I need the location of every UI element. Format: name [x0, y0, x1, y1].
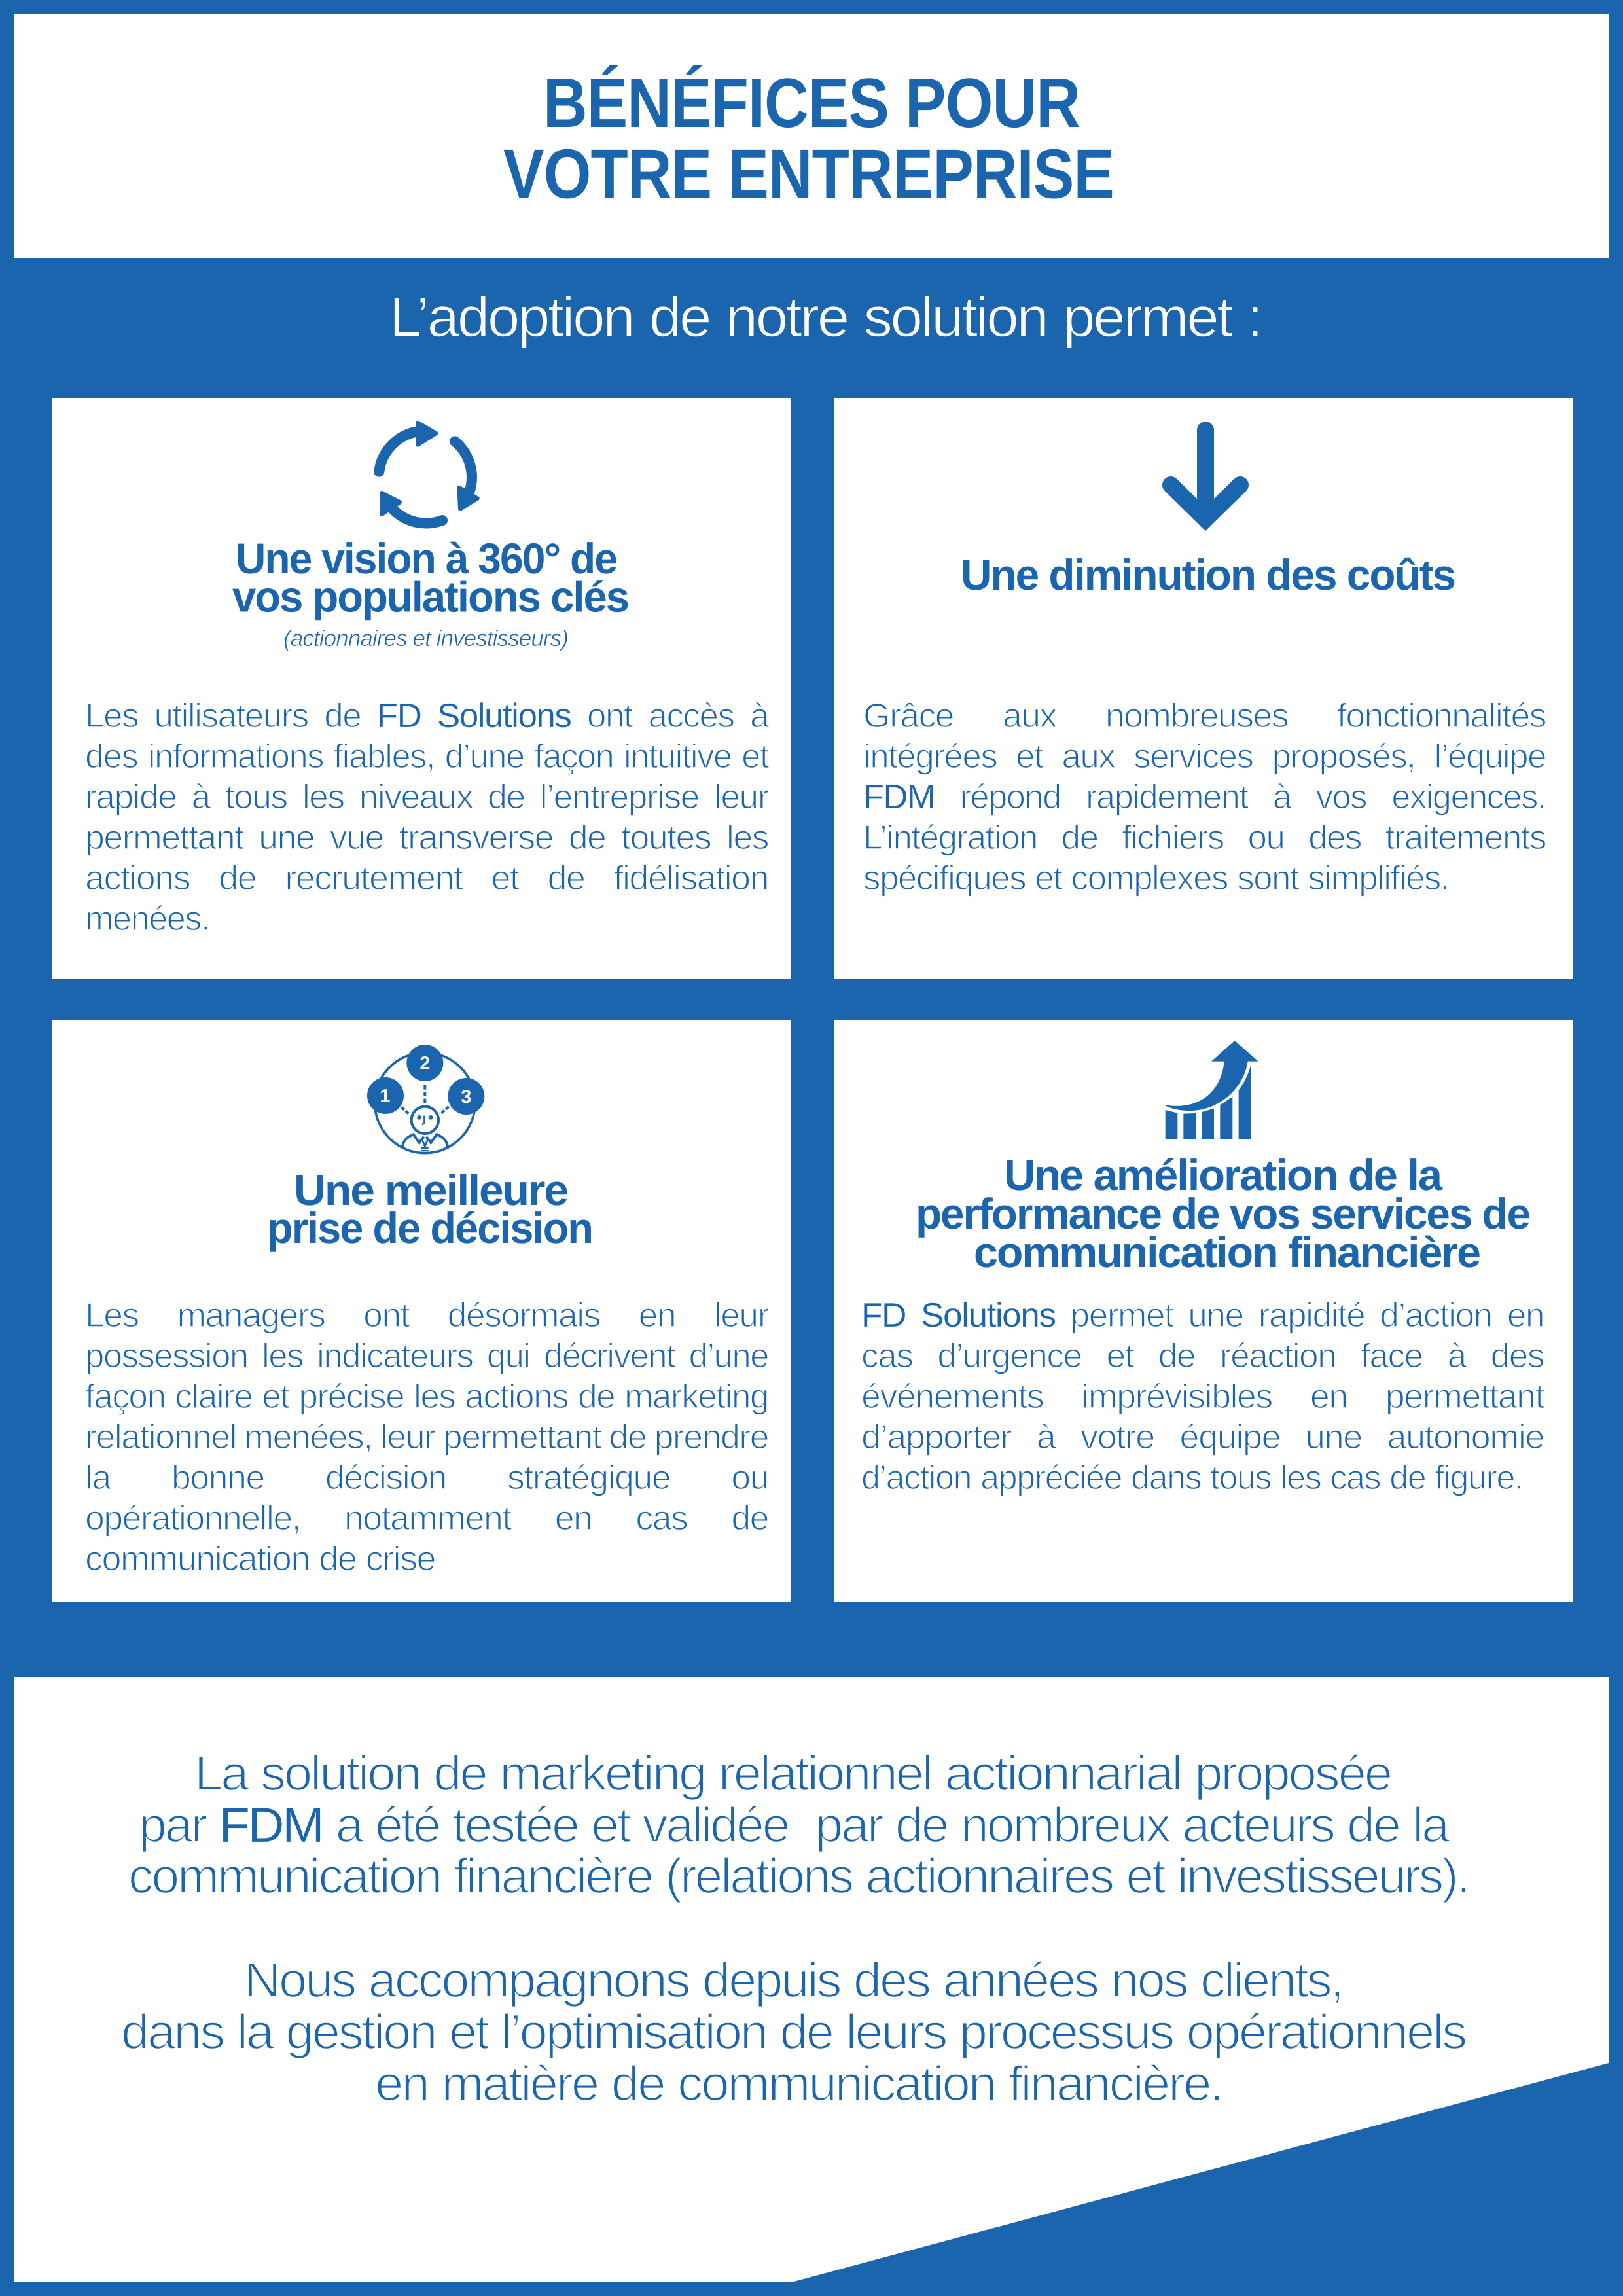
panel: closing statement — [14, 1677, 1609, 2282]
text: decisions body: Les managers ont désormais en leur — [85, 1297, 769, 1335]
note: audience: (actionnaires et investisseurs) — [283, 626, 568, 651]
text: performance body: d’action appréciée dans tous les cas de figure. — [861, 1459, 1523, 1497]
text: decisions body — [85, 1297, 769, 1578]
text: validation paragraph: communication financière (relations actionnaires et investisseurs). — [128, 1848, 1469, 1903]
title: VOTRE ENTREPRISE — [503, 135, 1114, 213]
text: validation paragraph — [128, 1746, 1469, 1903]
panel: performance — [834, 1020, 1573, 1602]
text: costs body: L’intégration de fichiers ou des traitements — [863, 819, 1546, 857]
heading: vision: Une vision à 360° de — [236, 534, 616, 583]
text: performance body: d’apporter à votre équipe une autonomie — [861, 1418, 1544, 1456]
heading: performance: Une amélioration de la — [1004, 1151, 1443, 1199]
icon: circular arrows — [379, 423, 477, 523]
title — [503, 63, 1114, 213]
text: decisions body: façon claire et précise les actions de marketing — [85, 1378, 768, 1416]
icon: growth chart — [1166, 1041, 1258, 1139]
heading: decisions: prise de décision — [267, 1204, 592, 1252]
panel: cost reduction — [834, 398, 1573, 979]
title: BÉNÉFICES POUR — [543, 63, 1080, 142]
heading: vision — [232, 534, 628, 620]
text: costs body: FDM répond rapidement à vos exigences. — [863, 778, 1546, 816]
text: support paragraph: dans la gestion et l’optimisation de leurs processus opérationnels — [121, 2004, 1466, 2059]
heading: performance: performance de vos services de — [916, 1189, 1529, 1238]
text: performance body — [861, 1297, 1545, 1497]
icon: decision circle — [367, 1045, 484, 1153]
text: costs body: Grâce aux nombreuses fonctionnalités — [863, 697, 1546, 735]
text: vision body: des informations fiables, d’une façon intuitive et — [85, 738, 770, 776]
heading: costs: Une diminution des coûts — [961, 550, 1455, 599]
text: vision body: Les utilisateurs de FD Solutions ont accès à — [85, 697, 770, 735]
text: support paragraph: Nous accompagnons depuis des années nos clients, — [244, 1952, 1342, 2007]
icon: decision circle: 1 — [380, 1085, 390, 1106]
icon: decision circle: 2 — [419, 1052, 430, 1073]
text: validation paragraph: La solution de marketing relationnel actionnarial proposée — [194, 1746, 1391, 1801]
heading: decisions — [267, 1166, 592, 1252]
text: validation paragraph: par FDM a été testée et validée par de nombreux acteurs de la — [139, 1797, 1450, 1852]
heading: performance — [916, 1151, 1529, 1276]
text: vision body: actions de recrutement et de fidélisation — [85, 859, 768, 897]
text: costs body: intégrées et aux services proposés, l’équipe — [863, 738, 1546, 776]
heading: performance: communication financière — [974, 1228, 1480, 1276]
text: costs body — [863, 697, 1546, 897]
text: decisions body: relationnel menées, leur permettant de prendre — [85, 1418, 768, 1456]
icon: decision circle: 3 — [461, 1086, 471, 1107]
text: vision body — [85, 697, 770, 938]
panel: title band — [14, 14, 1609, 258]
text: support paragraph: en matière de communication financière. — [375, 2056, 1222, 2111]
text: performance body: événements imprévisibles en permettant — [861, 1378, 1545, 1416]
text: vision body: menées. — [85, 900, 209, 938]
heading: decisions: Une meilleure — [294, 1166, 567, 1214]
text: decisions body: communication de crise — [85, 1540, 435, 1578]
text: decisions body: la bonne décision stratégique ou — [85, 1459, 768, 1497]
text: performance body: FD Solutions permet une rapidité d’action en — [861, 1297, 1544, 1335]
icon: down arrow — [1171, 430, 1240, 519]
panel: vision 360 — [52, 398, 791, 979]
text: support paragraph — [121, 1952, 1466, 2111]
text: vision body: rapide à tous les niveaux de l’entreprise leur — [85, 778, 769, 816]
text: decisions body: opérationnelle, notamment en cas de — [85, 1499, 768, 1537]
subtitle: L’adoption de notre solution permet : — [389, 286, 1261, 349]
text: decisions body: possession les indicateurs qui décrivent d’une — [85, 1337, 768, 1375]
text: costs body: spécifiques et complexes sont simplifiés. — [863, 859, 1449, 897]
text: performance body: cas d’urgence et de réaction face à des — [861, 1337, 1544, 1375]
panel: better decisions — [52, 1020, 791, 1602]
text: vision body: permettant une vue transverse de toutes les — [85, 819, 769, 857]
heading: vision: vos populations clés — [232, 572, 628, 620]
